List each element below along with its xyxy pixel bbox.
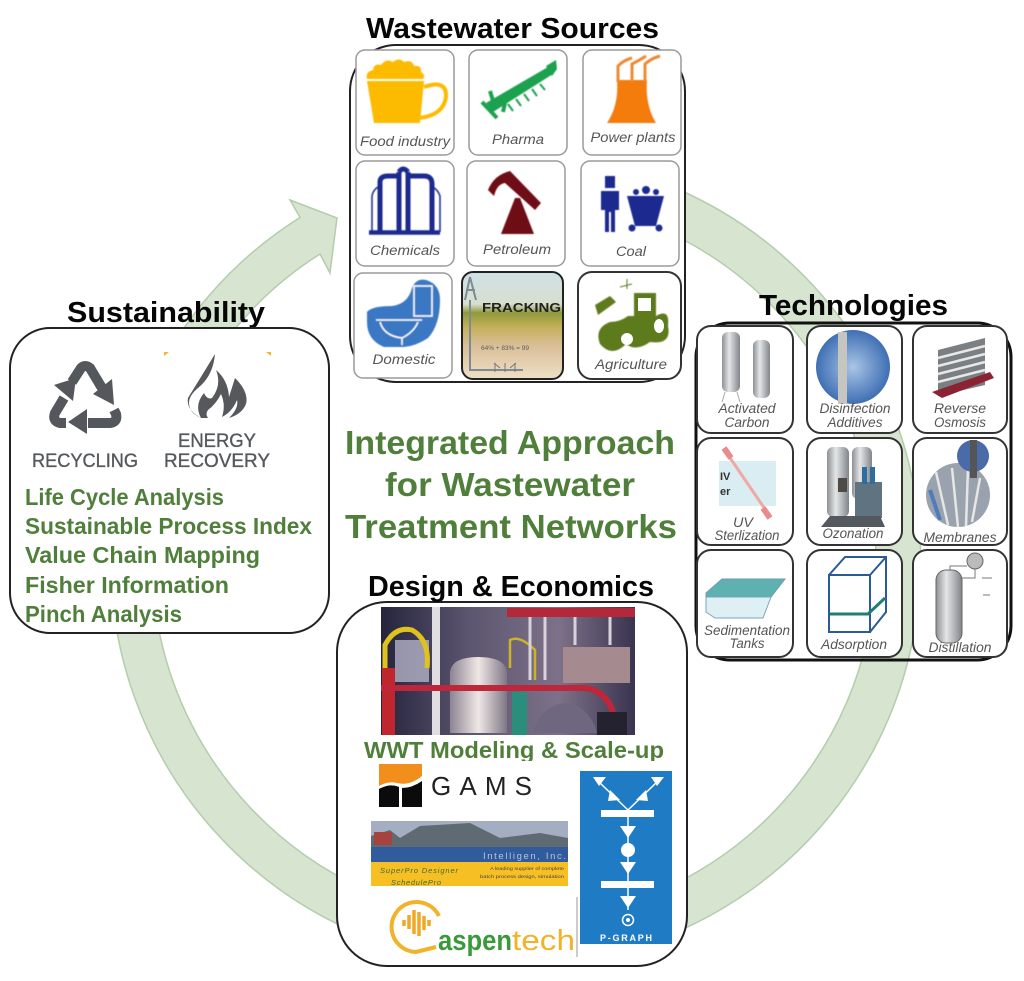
panel: technologies bbox=[696, 323, 1011, 660]
logo: Intelligen SuperPro Designer: Intelligen, Inc. bbox=[483, 851, 566, 862]
icon: recycling bbox=[54, 366, 116, 434]
panel: sustainability bbox=[10, 328, 329, 633]
heading: Technologies: Technologies bbox=[759, 290, 948, 322]
tile: disinfection additives: Disinfection bbox=[820, 401, 890, 416]
photo: process plant bbox=[381, 607, 635, 735]
tile: agriculture: Agriculture bbox=[594, 357, 667, 372]
center title: for Wastewater bbox=[385, 466, 635, 503]
caption: WWT modeling: WWT Modeling & Scale-up bbox=[364, 737, 664, 763]
list: sustainability metrics: Sustainable Process Index bbox=[25, 513, 312, 539]
center title: Treatment Networks bbox=[345, 508, 677, 545]
logo: Intelligen SuperPro Designer: batch process design, simulation bbox=[480, 874, 565, 879]
heading: Sustainability: Sustainability bbox=[67, 297, 265, 329]
tile: petroleum bbox=[467, 161, 565, 266]
tile: chemicals bbox=[356, 161, 454, 266]
center title: Integrated Approach bbox=[345, 424, 675, 461]
tile: sedimentation tanks: Tanks bbox=[730, 636, 765, 651]
tile: petroleum: Petroleum bbox=[483, 242, 551, 257]
panel: wastewater sources bbox=[350, 45, 685, 382]
list: sustainability metrics: Fisher Information bbox=[25, 572, 229, 598]
tile: fracking: FRACKING bbox=[482, 301, 561, 315]
tile: UV sterilization: UV bbox=[733, 515, 755, 530]
tile: UV sterilization bbox=[697, 438, 793, 545]
logo: aspentech bbox=[392, 897, 577, 957]
logo: P-Graph bbox=[580, 771, 672, 944]
tile: adsorption bbox=[807, 550, 902, 657]
tile: activated carbon: Activated bbox=[717, 401, 776, 416]
tile: activated carbon bbox=[697, 326, 793, 433]
logo: Intelligen SuperPro Designer: SchedulePro bbox=[391, 878, 441, 887]
cycle ring arrow bbox=[111, 188, 921, 965]
tile: disinfection additives bbox=[807, 326, 902, 433]
tile: UV sterilization: er bbox=[720, 486, 731, 498]
tile: fracking: 64% + 83% = 99 bbox=[481, 346, 530, 352]
list: sustainability metrics bbox=[25, 484, 312, 627]
logo: Intelligen SuperPro Designer: A leading supplier of complete bbox=[490, 866, 565, 871]
tile: membranes: Membranes bbox=[924, 530, 997, 545]
tile: coal: Coal bbox=[616, 244, 647, 259]
tile: distillation bbox=[913, 550, 1007, 657]
tile: pharma: Pharma bbox=[492, 132, 545, 147]
tile: activated carbon: Carbon bbox=[724, 415, 770, 430]
label: energy: ENERGY bbox=[178, 431, 256, 452]
tile: domestic bbox=[354, 273, 452, 378]
list: sustainability metrics: Value Chain Mapping bbox=[25, 542, 260, 568]
logo: Intelligen SuperPro Designer bbox=[371, 821, 568, 887]
logo: P-Graph: P-GRAPH bbox=[600, 933, 652, 943]
list: sustainability metrics: Pinch Analysis bbox=[25, 601, 182, 627]
heading: Design & Economics: Design & Economics bbox=[368, 571, 654, 603]
tile: reverse osmosis bbox=[913, 326, 1007, 433]
tile: food industry bbox=[356, 50, 454, 155]
logo: aspentech: tech bbox=[512, 925, 575, 957]
tile: adsorption: Adsorption bbox=[820, 637, 887, 652]
tile: reverse osmosis: Reverse bbox=[934, 401, 986, 416]
tile: reverse osmosis: Osmosis bbox=[934, 415, 986, 430]
logo: GAMS bbox=[379, 764, 532, 807]
logo: aspentech: aspen bbox=[438, 925, 512, 957]
center title bbox=[345, 424, 677, 545]
tile: domestic: Domestic bbox=[372, 352, 436, 367]
tile: UV sterilization: Sterlization bbox=[714, 528, 780, 543]
tile: coal bbox=[581, 161, 679, 266]
tile: sedimentation tanks: Sedimentation bbox=[704, 623, 790, 638]
heading: Wastewater Sources: Wastewater Sources bbox=[366, 13, 659, 45]
panel: design and economics bbox=[337, 602, 687, 966]
tile: ozonation bbox=[807, 438, 902, 545]
tile: food industry: Food industry bbox=[360, 134, 451, 149]
tile: sedimentation tanks bbox=[697, 550, 793, 657]
icon: energy recovery flame bbox=[164, 352, 271, 418]
list: sustainability metrics: Life Cycle Analysis bbox=[25, 484, 224, 510]
tile: fracking bbox=[462, 272, 563, 379]
tile: membranes bbox=[913, 438, 1007, 545]
tile: pharma bbox=[469, 50, 567, 155]
tile: UV sterilization: IV bbox=[720, 471, 731, 483]
label: recovery: RECOVERY bbox=[164, 451, 270, 472]
logo: GAMS: GAMS bbox=[431, 771, 532, 801]
tile: power plants: Power plants bbox=[590, 130, 676, 145]
tile: power plants bbox=[583, 50, 681, 155]
tile: agriculture bbox=[578, 272, 681, 379]
tile: ozonation: Ozonation bbox=[822, 526, 884, 541]
tile: disinfection additives: Additives bbox=[826, 415, 883, 430]
label: recycling: RECYCLING bbox=[32, 451, 138, 472]
tile: chemicals: Chemicals bbox=[370, 243, 440, 258]
tile: distillation: Distillation bbox=[928, 640, 992, 655]
logo: Intelligen SuperPro Designer: SuperPro Designer bbox=[380, 866, 458, 875]
